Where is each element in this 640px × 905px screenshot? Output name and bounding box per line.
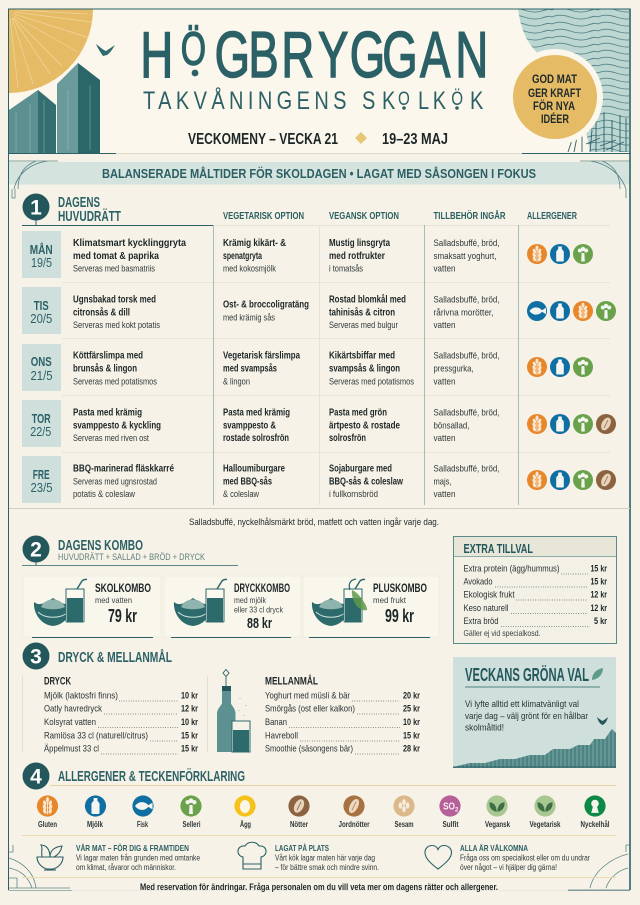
panel: veckans gröna val: Vi lyfte alltid ett klimatvänligt val [465,699,579,710]
panel: extra tillval: 5 kr [594,616,607,627]
title: Ö [181,24,206,75]
menu row: fredag: vatten [434,489,456,500]
menu row: torsdag: Pasta med krämig [73,406,142,418]
menu row: tisdag: vatten [434,320,456,331]
menu row: torsdag: solrosfrön [329,432,366,444]
menu row: torsdag: 22/5 [30,425,51,439]
menu row: torsdag: svamppesto & kyckling [73,420,161,432]
icon: leaf [592,668,603,680]
combo card: skolkombo: med vatten [95,595,132,605]
header illustration: sun [9,10,93,93]
icon: heart [425,846,452,869]
menu row: onsdag: Kikärtsbiffar med [329,350,395,362]
section 2: heading: 2 [30,538,42,562]
title: B [248,18,279,91]
info: vår mat [37,843,200,872]
menu row: onsdag: pressgurka, [434,364,474,374]
info: alla är välkomna: Fråga oss om specialkost eller om du undrar [460,854,590,862]
section 2: heading: HUVUDRÄTT + SALLAD + BRÖD + DRYCK [58,552,205,562]
menu row: tisdag: 20/5 [30,312,52,326]
icon: chef hat [238,842,266,869]
allergen legend: Sulfit [442,820,459,829]
menu row: fredag: BBQ-marinerad fläskkarré [73,462,174,474]
info: lagat på plats: Vårt kök lagar maten här varje dag [275,854,375,862]
menu row: tisdag: Serveras med bulgur [329,320,398,330]
section 1: heading: 1 [30,196,42,220]
menu row: fredag: majs, [434,476,452,488]
price list: mellanmål: Banan [265,717,287,728]
icon: bird [597,717,608,725]
info: vår mat: Vi lagar maten från grunden med omtanke [76,854,200,862]
section 1: heading: DAGENS [58,195,100,211]
section 4: heading: ALLERGENER & TECKENFÖRKLARING [58,768,245,785]
allergen legend: Ägg [240,820,251,829]
menu row: fredag: i fullkornsbröd [329,489,378,499]
week line: VECKOMENY – VECKA 21 [188,131,338,148]
icon: salad bowl [37,845,63,870]
panel: extra tillval: 15 kr [590,564,607,574]
price list: mellanmål: 15 kr [403,730,420,742]
menu row: onsdag: Vegetarisk färslimpa [223,350,300,362]
combo card: pluskombo: 99 kr [385,606,414,626]
combo card: skolkombo [23,576,161,638]
badge: god mat: GOD MAT [532,74,577,86]
combo card: dryckkombo [164,576,301,638]
panel: extra tillval: 15 kr [590,576,607,588]
menu row: tisdag: Salladsbuffé, bröd, [434,294,500,306]
panel: veckans gröna val [453,657,616,768]
price list: mellanmål: Smoothie (säsongens bär) [265,744,353,754]
menu row: måndag: Krämig kikärt- & [223,237,286,249]
combo card: dryckkombo: eller 33 cl dryck [234,604,284,614]
allergen legend: Vegansk [485,820,510,829]
menu row: fredag: Serveras med ugnsrostad [73,476,157,486]
menu row: onsdag: brunsås & lingon [73,362,137,374]
combo card: pluskombo [303,576,439,638]
column heads: TILLBEHÖR INGÅR [434,209,506,222]
menu row: torsdag: Pasta med grön [329,406,387,418]
section 3: heading [22,642,172,670]
subtitle: K [470,87,483,115]
allergen legend: Jordnötter [338,820,370,829]
column heads [223,209,578,222]
panel: extra tillval: Extra protein (ägg/hummus) [464,564,560,574]
column heads: VEGANSK OPTION [329,211,399,222]
menu row: måndag: Serveras med basmatriis [73,264,155,274]
subtitle: O [398,87,410,109]
combo card: dryckkombo: med mjölk [234,595,267,605]
menu row: måndag: Salladsbuffé, bröd, [434,238,500,249]
title: H [140,18,173,91]
menu row: måndag: Klimatsmart kycklinggryta [73,237,186,249]
combo card: dryckkombo: DRYCKKOMBO [234,581,290,595]
price list: mellanmål: 10 kr [403,717,420,728]
info: vår mat: om klimat, råvaror och människor. [76,863,176,872]
price list: dryck: DRYCK [44,676,71,688]
price list: dryck: Mjölk (laktosfri finns) [44,690,118,702]
icon: bottle and glass [217,670,250,752]
decorative corners [9,161,630,890]
badge: god mat: IDÉER [541,113,570,126]
title: Y [318,18,348,91]
info: alla är välkomna [425,843,590,872]
menu row: måndag: smaksatt yoghurt, [434,251,496,262]
title: R [281,18,314,91]
price list: mellanmål: 25 kr [403,704,420,714]
week line: 19–23 MAJ [382,131,448,148]
subtitle [143,87,483,115]
menu row: torsdag: vatten [434,433,456,444]
title: G [350,18,385,91]
body background [9,154,630,890]
combo card: pluskombo: med frukt [373,595,407,605]
note: included daily: Salladsbuffé, nyckelhålsmärkt bröd, matfett och vatten ingår varje dag. [189,517,439,528]
menu row: måndag: med kokosmjölk [223,264,276,274]
menu row: tisdag [22,287,616,334]
menu row: fredag: BBQ-sås & coleslaw [329,476,404,488]
price list: mellanmål: MELLANMÅL [265,674,318,688]
menu row: torsdag [22,400,616,447]
subtitle: LK [418,87,446,115]
price list: dryck: 12 kr [181,704,198,714]
menu row: måndag: spenatgryta [223,250,262,262]
menu row: måndag: med rotfrukter [329,250,385,262]
price list: dryck: Äppelmust 33 cl [44,744,99,754]
price list: mellanmål: Havreboll [265,730,298,742]
panel: extra tillval: 12 kr [590,603,607,614]
menu row: torsdag: Salladsbuffé, bröd, [434,408,500,418]
header illustration: towers [8,63,116,154]
title: G [215,18,250,91]
allergen legend: Nyckelhål [580,820,610,829]
panel: extra tillval [454,536,616,644]
badge: god mat [507,49,603,145]
combo card: pluskombo: PLUSKOMBO [373,581,427,595]
menu row: fredag: Salladsbuffé, bröd, [434,464,500,474]
menu row: onsdag: Serveras med potatismos [329,376,414,386]
panel: extra tillval: Gäller ej vid specialkosd. [464,628,540,638]
price list: mellanmål: 28 kr [403,744,420,754]
menu row: onsdag: & lingon [223,376,250,386]
section 1: heading [22,194,121,226]
allergen legend: Fisk [137,820,148,829]
menu row: torsdag: Pasta med krämig [223,406,290,418]
title: G [382,18,418,91]
menu row: onsdag: Salladsbuffé, bröd, [434,350,500,362]
menu row: tisdag: med krämig sås [223,312,275,322]
panel: veckans gröna val: varje dag – välj grönt för en hållbar [465,711,588,722]
menu row: måndag: vatten [434,264,456,274]
price list: dryck [44,676,198,754]
title [140,18,488,91]
footer note: Med reservation för ändringar. Fråga personalen om du vill veta mer om dagens rätter och allergener. [140,882,498,893]
menu row: fredag: potatis & coleslaw [73,489,135,499]
menu row: tisdag: Ost- & broccoligratäng [223,298,309,310]
menu row: måndag [22,231,593,278]
menu row: fredag: med BBQ-sås [223,476,272,488]
menu row: måndag: med tomat & paprika [73,250,159,262]
menu row: tisdag: citronsås & dill [73,306,130,318]
allergen legend: Vegetarisk [530,820,561,829]
menu row: torsdag: svamppesto & [223,420,276,432]
section 2: heading: DAGENS KOMBO [58,538,143,554]
price list: dryck: 10 kr [181,690,198,702]
menu row: torsdag: rostade solrosfrön [223,432,289,444]
banner: BALANSERADE MÅLTIDER FÖR SKOLDAGEN • LAGAT MED SÅSONGEN I FOKUS [102,166,536,181]
menu row: fredag: 23/5 [30,481,53,495]
menu row: torsdag: ärtpesto & rostade [329,420,400,432]
allergen legend: Sesam [394,820,414,829]
combo card: skolkombo: 79 kr [108,606,137,626]
price list: dryck: 10 kr [181,717,198,728]
column heads: ALLERGENER [527,211,578,222]
combo card: skolkombo: SKOLKOMBO [95,581,151,595]
column heads: VEGETARISK OPTION [223,211,304,222]
badge: god mat: GER KRAFT [528,88,581,100]
menu row: torsdag: Serveras med riven ost [73,433,149,443]
menu row: måndag: Mustig linsgryta [329,237,390,249]
menu row: tisdag: tahinisås & citron [329,306,395,318]
banner [9,162,629,184]
menu row: onsdag: vatten [434,376,456,388]
price list: dryck: 15 kr [181,744,198,754]
menu row: måndag: MÅN [30,242,53,257]
menu row: onsdag [22,344,593,391]
section 2: heading [22,536,238,566]
allergen legend: Gluten [38,820,57,829]
menu row: fredag [22,456,616,503]
menu row: onsdag: ONS [31,354,52,369]
menu row: tisdag: Rostad blomkål med [329,294,406,306]
info: lagat på plats: LAGAT PÅ PLATS [275,843,329,853]
price list: dryck: Oatly havredryck [44,704,102,714]
info: lagat på plats: – för bättre smak och mindre svinn. [275,863,379,872]
panel: extra tillval: Ekologisk frukt [464,590,515,600]
header illustration: water texture [518,9,630,154]
section 4: heading: 4 [30,766,42,788]
section 3: heading: 3 [30,646,42,668]
info: alla är välkomna: över något – vi hjälper dig gärna! [460,863,557,872]
menu row: tisdag: Ugnsbakad torsk med [73,294,156,306]
menu row: fredag: Halloumiburgare [223,462,285,474]
menu row: torsdag: TOR [32,411,51,426]
menu row: torsdag: bönsallad, [434,420,470,432]
menu row: onsdag: svampsås & lingon [329,362,400,374]
price list: dryck: Kolsyrat vatten [44,717,96,728]
menu row: onsdag: med svampsås [223,362,277,374]
menu row: tisdag: Serveras med kokt potatis [73,320,160,330]
info: vår mat: VÅR MAT – FÖR DIG & FRAMTIDEN [76,843,189,853]
panel: extra tillval: Extra bröd [464,616,498,627]
header background [9,9,630,154]
allergen legend: SO [443,802,455,812]
panel: extra tillval: Keso naturell [464,603,508,614]
badge: god mat: FÖR NYA [533,100,575,113]
allergen legend: Nötter [290,820,308,829]
menu row: tisdag: TIS [34,298,49,313]
combo card: dryckkombo: 88 kr [247,615,272,632]
price list: mellanmål [265,674,420,754]
allergen legend: 2 [455,808,459,814]
title: A [420,18,451,91]
menu row: onsdag: Serveras med potatismos [73,376,157,386]
illustration: rising rooftops [453,729,616,768]
info: lagat på plats [238,842,379,872]
price list: mellanmål: Smörgås (ost eller kalkon) [265,704,355,714]
price list: mellanmål: Yoghurt med müsli & bär [265,690,350,702]
section 3: heading: DRYCK & MELLANMÅL [58,649,172,666]
allergen legend: Selleri [182,820,200,829]
header illustration: bird [96,44,115,56]
menu row: onsdag: 21/5 [30,369,53,383]
menu row: fredag: Sojaburgare med [329,462,392,474]
allergen legend: Mjölk [87,820,103,829]
price list: dryck: 15 kr [181,730,198,742]
menu row: fredag: FRE [33,467,50,482]
menu row: måndag: i tomatsås [329,264,363,274]
panel: veckans gröna val: skolmåltid! [465,722,504,734]
menu row: måndag: 19/5 [31,256,52,270]
subtitle: TAKVÅNINGENS [143,87,361,115]
menu row: tisdag: rårivna morötter, [434,308,494,318]
info: alla är välkomna: ALLA ÄR VÄLKOMNA [460,843,528,853]
price list: mellanmål: 20 kr [403,690,420,702]
section 1: heading: HUVUDRÄTT [58,208,121,225]
menu row: fredag: & coleslaw [223,489,259,499]
panel: extra tillval: 12 kr [590,590,607,600]
subtitle: SK [362,87,395,115]
section 4: heading [22,762,616,790]
panel: extra tillval: Avokado [464,576,492,588]
title: N [455,18,488,91]
menu row: onsdag: Köttfärslimpa med [73,350,143,362]
allergen legend [37,795,609,829]
subtitle: Ö [451,87,463,109]
price list: dryck: Ramlösa 33 cl (naturell/citrus) [44,730,148,742]
header illustration: reeds [568,112,626,152]
header rule [116,152,522,154]
panel: extra tillval: EXTRA TILLVAL [464,541,533,556]
